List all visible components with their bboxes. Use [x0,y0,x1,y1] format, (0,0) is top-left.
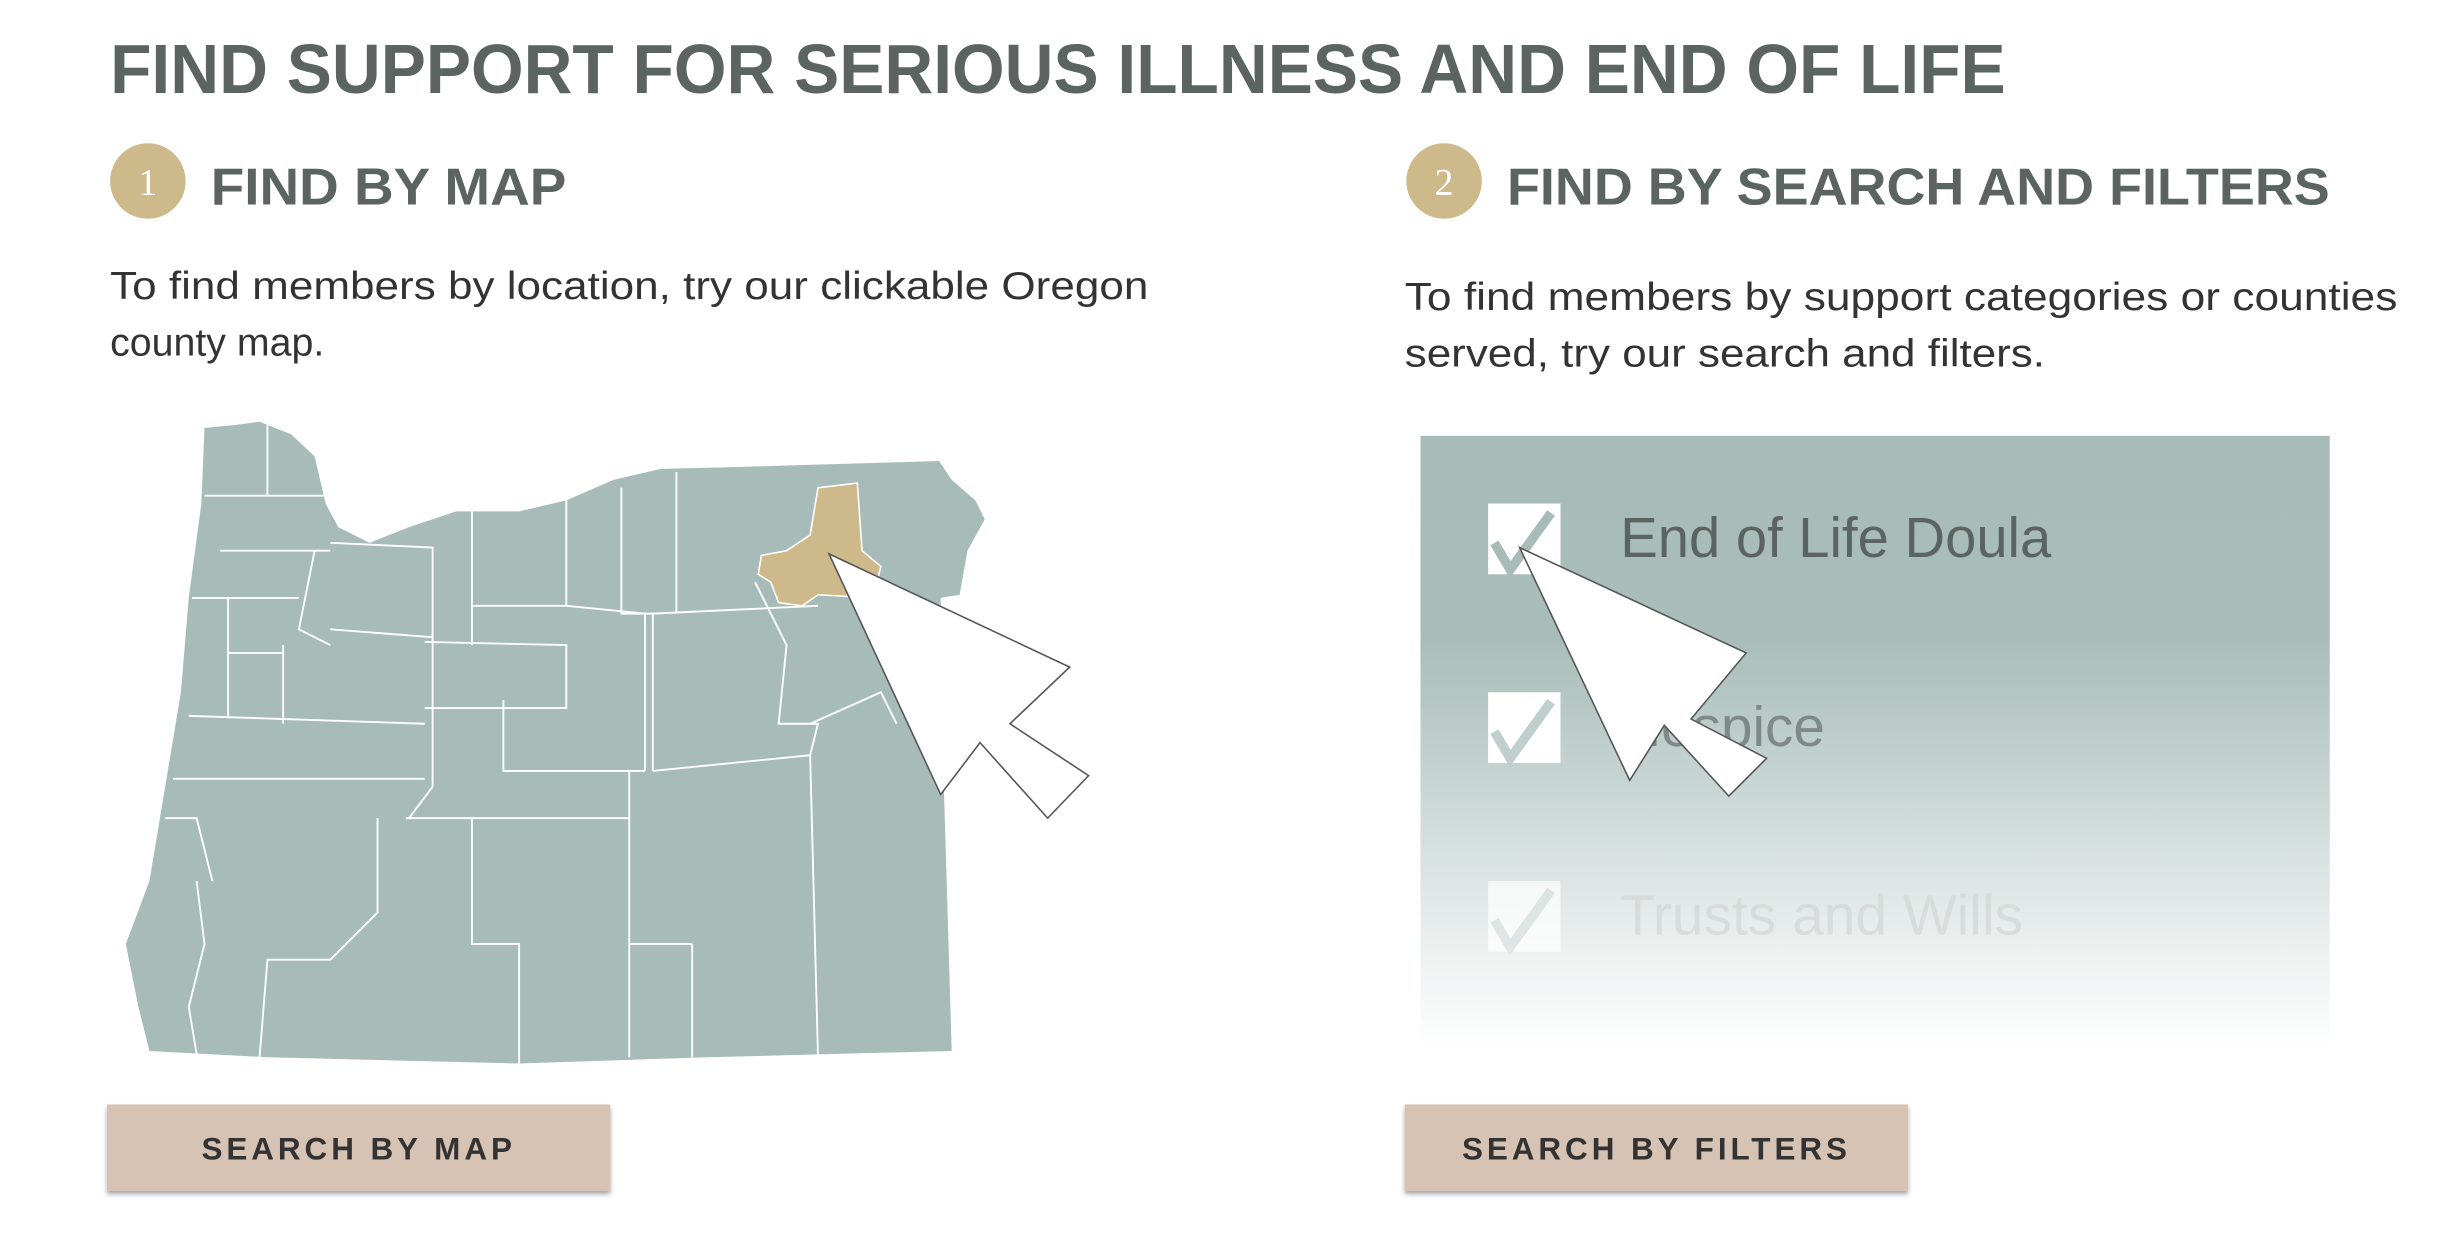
icon: number 1 circle: 1 [138,162,157,204]
checkbox: trusts and wills: Trusts and Wills [1620,885,2023,948]
button: search by map: SEARCH BY MAP [201,1131,516,1166]
map: Oregon counties [126,422,985,1064]
text block: filter description: To find members by support categories or counties [1405,275,2397,319]
highlighted county [758,483,881,606]
checkbox: hospice [1488,692,1825,763]
checkbox: end of life doula [1488,504,2052,574]
title: FIND SUPPORT FOR SERIOUS ILLNESS AND END OF LIFE [110,30,2006,108]
checkbox: end of life doula: End of Life Doula [1620,507,2052,570]
icon: cursor on map [829,554,1089,818]
text block: filter description [1405,275,2397,376]
icon: number 2 circle [1406,143,1482,219]
checkbox: hospice: Hospice [1620,696,1825,759]
panel: find by map [107,143,1148,1191]
text block: map description: county map. [110,321,324,365]
button: search by filters: SEARCH BY FILTERS [1462,1131,1851,1166]
text block: map description [110,264,1148,365]
text block: map description: To find members by location, try our clickable Oregon [110,264,1148,308]
panel: find by search and filters [1405,143,2397,1191]
checkbox: trusts and wills [1488,881,2023,952]
heading: find by search and filters: FIND BY SEARCH AND FILTERS [1507,159,2330,217]
icon: number 1 circle [110,143,186,219]
icon: cursor on filters [1520,548,1767,796]
filter panel [1420,436,2330,1051]
button: search by map [107,1104,610,1191]
heading: find by map: FIND BY MAP [211,159,566,217]
text block: filter description: served, try our search and filters. [1405,332,2045,376]
icon: number 2 circle: 2 [1435,162,1454,204]
button: search by filters [1405,1104,1908,1191]
